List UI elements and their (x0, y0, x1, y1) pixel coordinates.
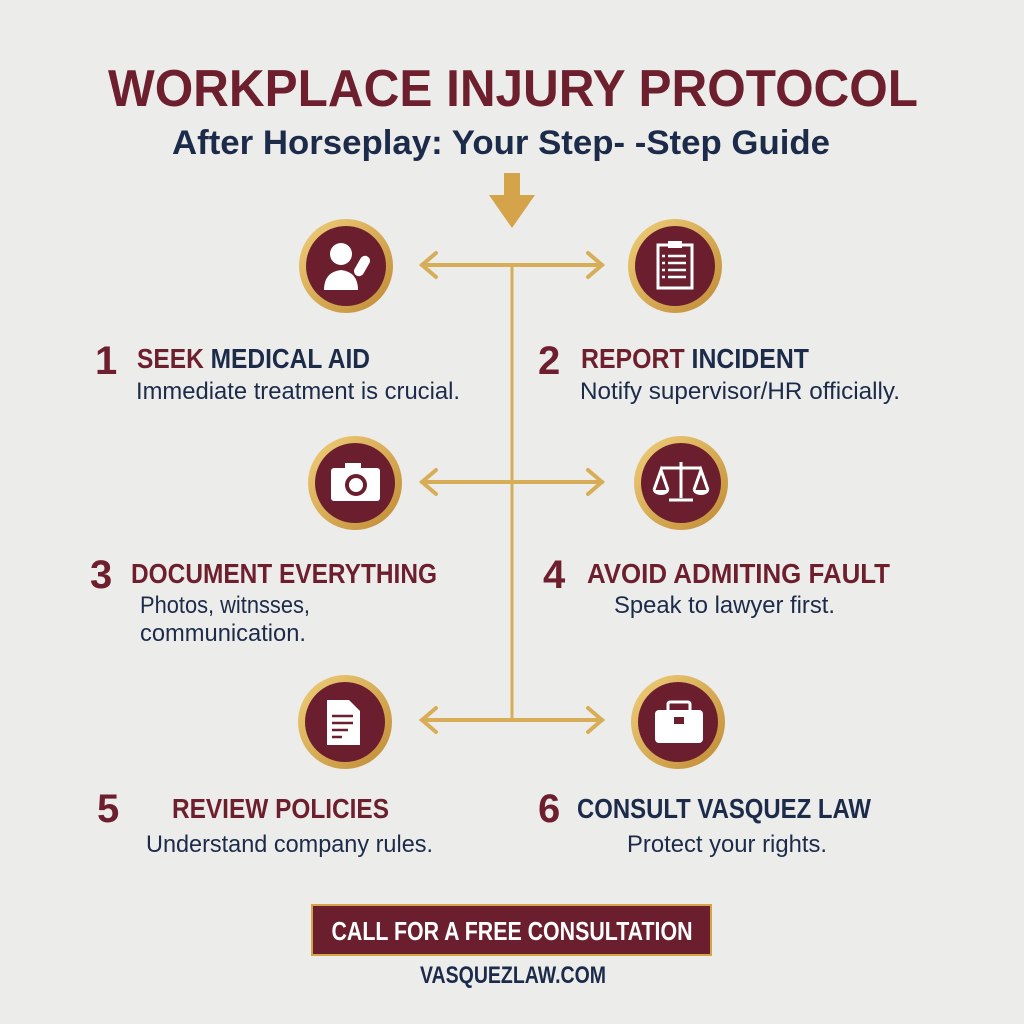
step 4: AVOID ADMITING FAULT (587, 558, 890, 589)
step 5 (97, 787, 433, 858)
step 6: 6 (538, 787, 560, 831)
connector lines (422, 253, 602, 732)
icon: document (298, 675, 392, 769)
step 2: REPORT INCIDENT (581, 343, 809, 374)
step 3: communication. (140, 620, 306, 647)
step 2: Notify supervisor/HR officially. (580, 378, 900, 405)
icon: camera (308, 436, 402, 530)
step 6: Protect your rights. (627, 831, 827, 858)
step 1: 1 (95, 339, 117, 383)
step 5: 5 (97, 787, 119, 831)
step 3 (90, 553, 437, 647)
step 6: CONSULT VASQUEZ LAW (577, 793, 871, 824)
subtitle: After Horseplay: Your Step- -Step Guide (172, 124, 830, 162)
call to action button (312, 905, 711, 955)
icon: scales (634, 436, 728, 530)
step 4: 4 (543, 553, 566, 597)
step 1 (95, 339, 460, 405)
step 4 (543, 553, 890, 619)
step 6 (538, 787, 871, 858)
step 4: Speak to lawyer first. (614, 592, 835, 619)
title: WORKPLACE INJURY PROTOCOL (108, 60, 918, 118)
icon: clipboard (628, 219, 722, 313)
arrow: down (489, 173, 535, 228)
step 1: SEEK MEDICAL AID (137, 343, 370, 374)
step 5: REVIEW POLICIES (172, 793, 389, 824)
call to action button: CALL FOR A FREE CONSULTATION (332, 916, 692, 946)
step 3: 3 (90, 553, 112, 597)
icon: briefcase (631, 675, 725, 769)
step 5: Understand company rules. (146, 831, 433, 858)
step 2 (538, 339, 900, 405)
website: VASQUEZLAW.COM (420, 962, 606, 989)
step 2: 2 (538, 339, 560, 383)
step 3: Photos, witnsses, (140, 592, 310, 619)
step 1: Immediate treatment is crucial. (136, 378, 460, 405)
step 3: DOCUMENT EVERYTHING (131, 558, 437, 589)
icon: person medical (299, 219, 393, 313)
